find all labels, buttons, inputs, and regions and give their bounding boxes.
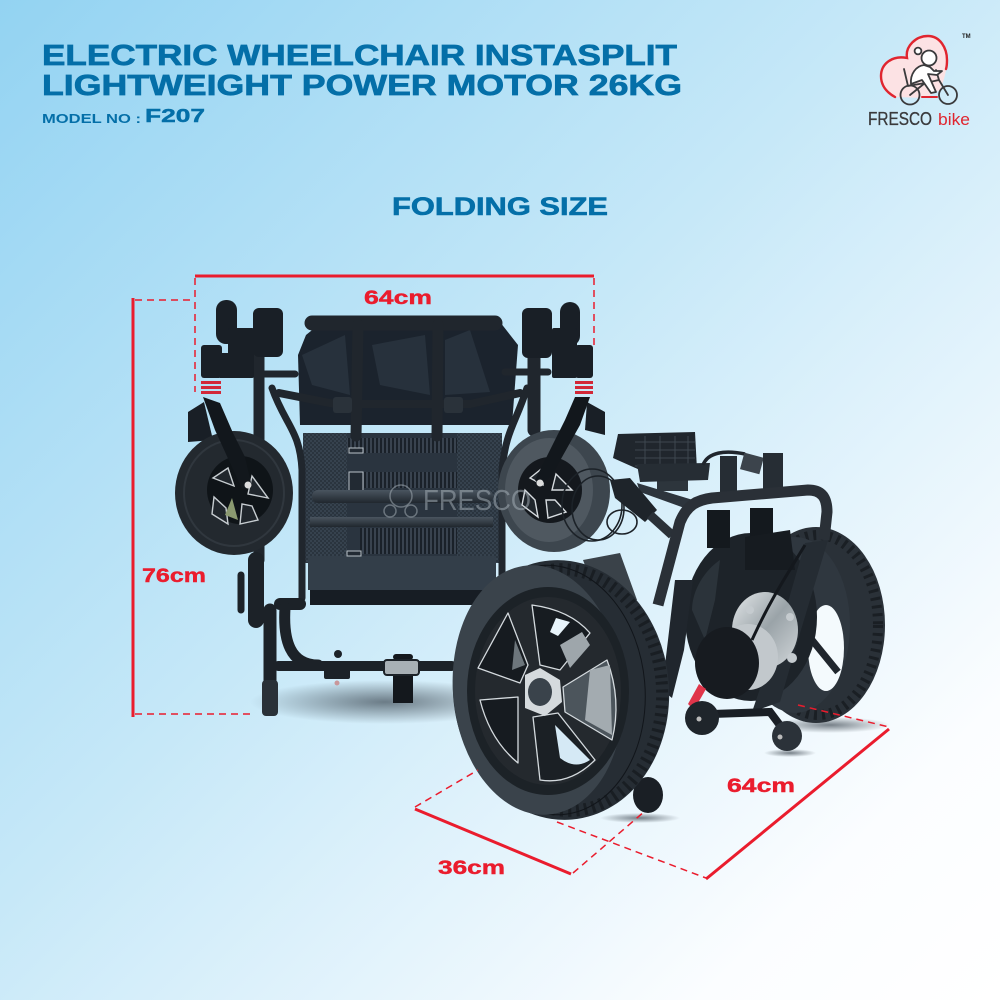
wheel windows <box>478 605 616 781</box>
floor shadows <box>250 680 890 823</box>
logo heart <box>881 36 947 98</box>
dimension: 36cm depth <box>415 770 645 879</box>
watermark <box>384 485 531 517</box>
big wheel <box>442 551 680 829</box>
dimension: 76cm height <box>133 298 255 717</box>
dimension: 64cm length <box>557 705 889 879</box>
heading: folding size: FOLDING SIZE <box>392 193 608 221</box>
wheelchair: folded rear unit <box>442 432 885 829</box>
rear wheel <box>740 527 885 723</box>
dimension: 76cm height: 76cm <box>142 566 206 587</box>
right front wheel <box>498 397 610 552</box>
wheel hub <box>525 668 562 716</box>
back frame tubes <box>250 323 548 598</box>
logo: Fresco bike <box>868 34 971 129</box>
logo: Fresco bike: bike <box>938 111 970 129</box>
seat fabric panel <box>303 433 502 563</box>
wiring and connector <box>610 452 764 535</box>
coiled cable <box>562 469 637 541</box>
footrest clamp <box>324 650 419 703</box>
black block behind big wheel <box>583 553 637 605</box>
back plate <box>685 453 828 712</box>
red release handle <box>688 684 706 710</box>
left front wheel <box>175 397 293 555</box>
right armrest and spring <box>522 302 605 435</box>
title <box>42 40 682 102</box>
title: ELECTRIC WHEELCHAIR INSTASPLIT <box>42 40 677 72</box>
strap loops <box>347 448 363 556</box>
left armrest and spring <box>188 300 283 442</box>
motor <box>695 545 805 699</box>
main frame tube <box>658 490 827 605</box>
controller box <box>613 432 710 491</box>
logo wordmark: FRESCO <box>868 109 932 129</box>
model number <box>42 106 205 126</box>
model number: F207 <box>145 106 205 126</box>
watermark: FRESCO <box>423 485 531 517</box>
logo rider and bike <box>900 48 957 104</box>
logo: Fresco bike: TM <box>962 34 971 40</box>
dimension: 36cm depth: 36cm <box>438 858 505 879</box>
knuckles <box>333 397 463 413</box>
dimension: 64cm length: 64cm <box>727 776 795 797</box>
model number: MODEL NO : <box>42 111 141 126</box>
wheelchair: folded front view <box>175 300 637 716</box>
title: LIGHTWEIGHT POWER MOTOR 26KG <box>42 70 682 102</box>
dimension: 64cm width top <box>195 276 594 392</box>
dimension: 64cm width top: 64cm <box>364 288 432 309</box>
seat cross bars <box>310 490 493 527</box>
seat back fabric <box>298 322 518 425</box>
casters <box>685 701 802 751</box>
front legs and crossbar <box>241 560 452 690</box>
